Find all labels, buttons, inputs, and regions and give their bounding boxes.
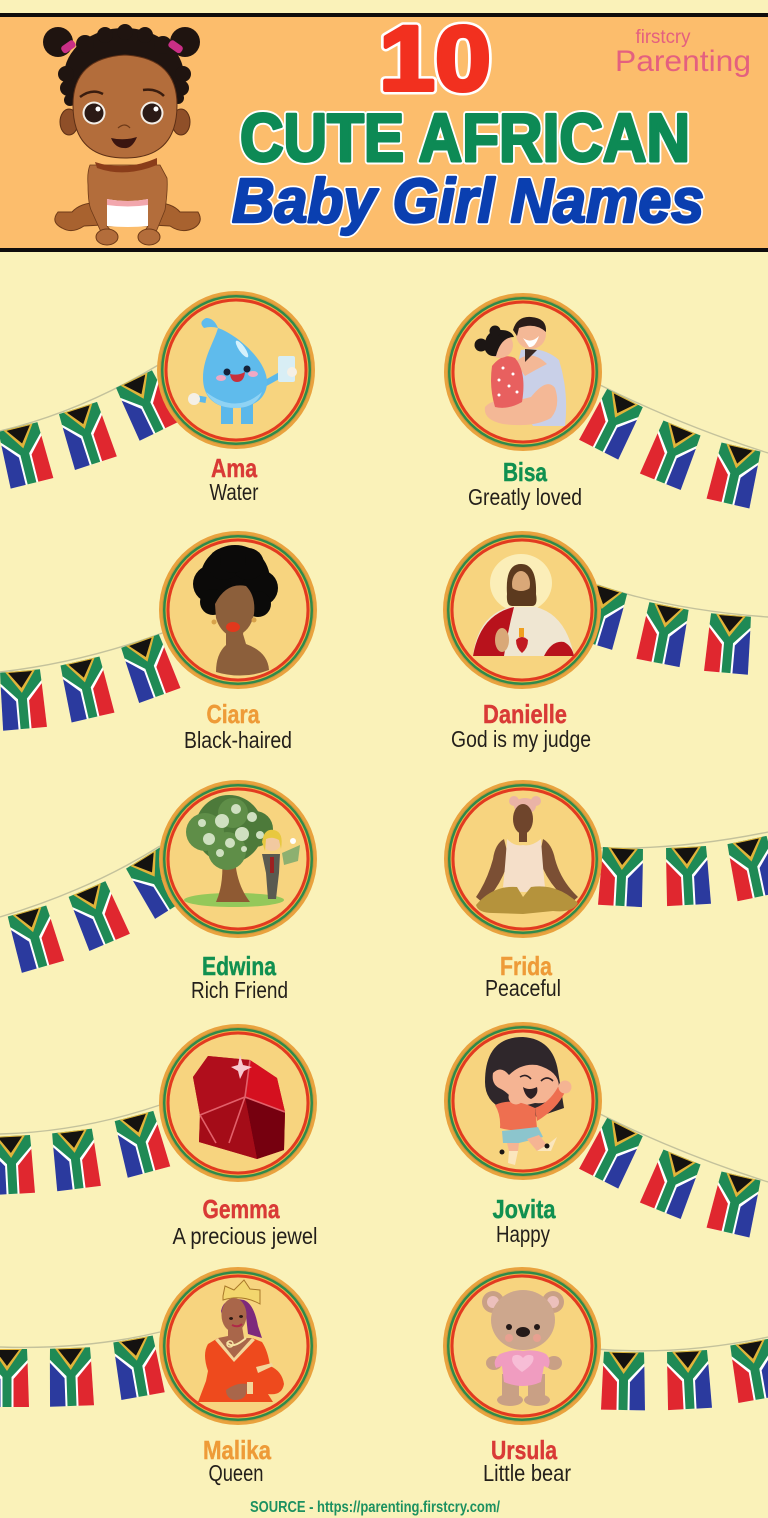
logo: firstcry parenting bbox=[615, 27, 751, 78]
name: Bisa bbox=[468, 457, 582, 510]
name: Jovita bbox=[492, 1194, 556, 1247]
name: Ama: Water bbox=[210, 479, 259, 505]
name: Bisa: Greatly loved bbox=[468, 484, 582, 510]
name: Malika: Malika bbox=[203, 1435, 271, 1465]
name: Gemma: Gemma bbox=[202, 1194, 280, 1224]
name: Ciara bbox=[184, 699, 292, 753]
name: Frida bbox=[485, 951, 561, 1001]
logo: firstcry parenting: firstcry bbox=[636, 27, 691, 48]
title number 10: 10 bbox=[379, 8, 491, 110]
name: Malika: Queen bbox=[208, 1460, 264, 1486]
name: Gemma bbox=[172, 1194, 318, 1249]
medallion: Edwina money tree bbox=[159, 780, 317, 938]
header banner bbox=[0, 8, 768, 252]
name: Jovita: Jovita bbox=[492, 1194, 556, 1224]
medallion: Gemma ruby bbox=[159, 1024, 317, 1182]
title line: baby girl names: Baby Girl Names bbox=[232, 167, 704, 236]
medallion: Malika queen bbox=[159, 1267, 317, 1425]
medallion: Ciara afro woman bbox=[159, 531, 317, 689]
name: Ciara: Ciara bbox=[206, 699, 260, 729]
illustration: baby girl bbox=[43, 24, 200, 245]
title number 10: 10 bbox=[379, 8, 491, 110]
title line: baby girl names: Baby Girl Names bbox=[232, 167, 704, 236]
name: Ama bbox=[210, 453, 259, 505]
bunting: Frida bbox=[598, 832, 768, 907]
bunting: Ursula bbox=[595, 1337, 768, 1410]
medallion: Jovita happy girl bbox=[444, 1022, 602, 1180]
bunting: Jovita bbox=[579, 1114, 768, 1237]
name: Jovita: Happy bbox=[496, 1221, 550, 1247]
title line: cute african: CUTE AFRICAN bbox=[240, 100, 690, 176]
name: Ursula bbox=[483, 1435, 571, 1486]
name: Edwina: Edwina bbox=[202, 951, 276, 981]
name: Ciara: Black-haired bbox=[184, 727, 292, 753]
name: Gemma: A precious jewel bbox=[172, 1223, 318, 1249]
name: Malika bbox=[203, 1435, 271, 1486]
bunting: Ama bbox=[0, 364, 179, 489]
title line: cute african: CUTE AFRICAN bbox=[240, 100, 690, 176]
name: Danielle: God is my judge bbox=[451, 726, 591, 752]
name: Edwina: Rich Friend bbox=[191, 977, 288, 1003]
bunting: Malika bbox=[0, 1332, 165, 1407]
name: Edwina bbox=[191, 951, 288, 1003]
name: Danielle bbox=[451, 699, 591, 752]
bunting: Bisa bbox=[579, 385, 768, 508]
source line: SOURCE - https://parenting.firstcry.com/ bbox=[250, 1499, 501, 1516]
name: Danielle: Danielle bbox=[483, 699, 567, 729]
bunting: Edwina bbox=[0, 846, 192, 973]
bunting: Danielle bbox=[570, 582, 768, 675]
name: Frida: Frida bbox=[500, 951, 552, 981]
medallion: Danielle Jesus figure bbox=[443, 531, 601, 689]
medallion: Frida meditating woman bbox=[444, 780, 602, 938]
logo: firstcry parenting: Parenting bbox=[615, 45, 751, 78]
name: Ursula: Little bear bbox=[483, 1460, 571, 1486]
medallion: Bisa father and daughter bbox=[444, 293, 602, 451]
name: Ursula: Ursula bbox=[491, 1435, 557, 1465]
medallion: Ursula teddy bear bbox=[443, 1267, 601, 1425]
name: Bisa: Bisa bbox=[503, 457, 547, 487]
name: Frida: Peaceful bbox=[485, 975, 561, 1001]
name: Ama: Ama bbox=[211, 453, 257, 483]
bunting: Ciara bbox=[0, 632, 181, 731]
bunting: Gemma bbox=[0, 1105, 170, 1195]
medallion: Ama water drop bbox=[157, 291, 315, 449]
